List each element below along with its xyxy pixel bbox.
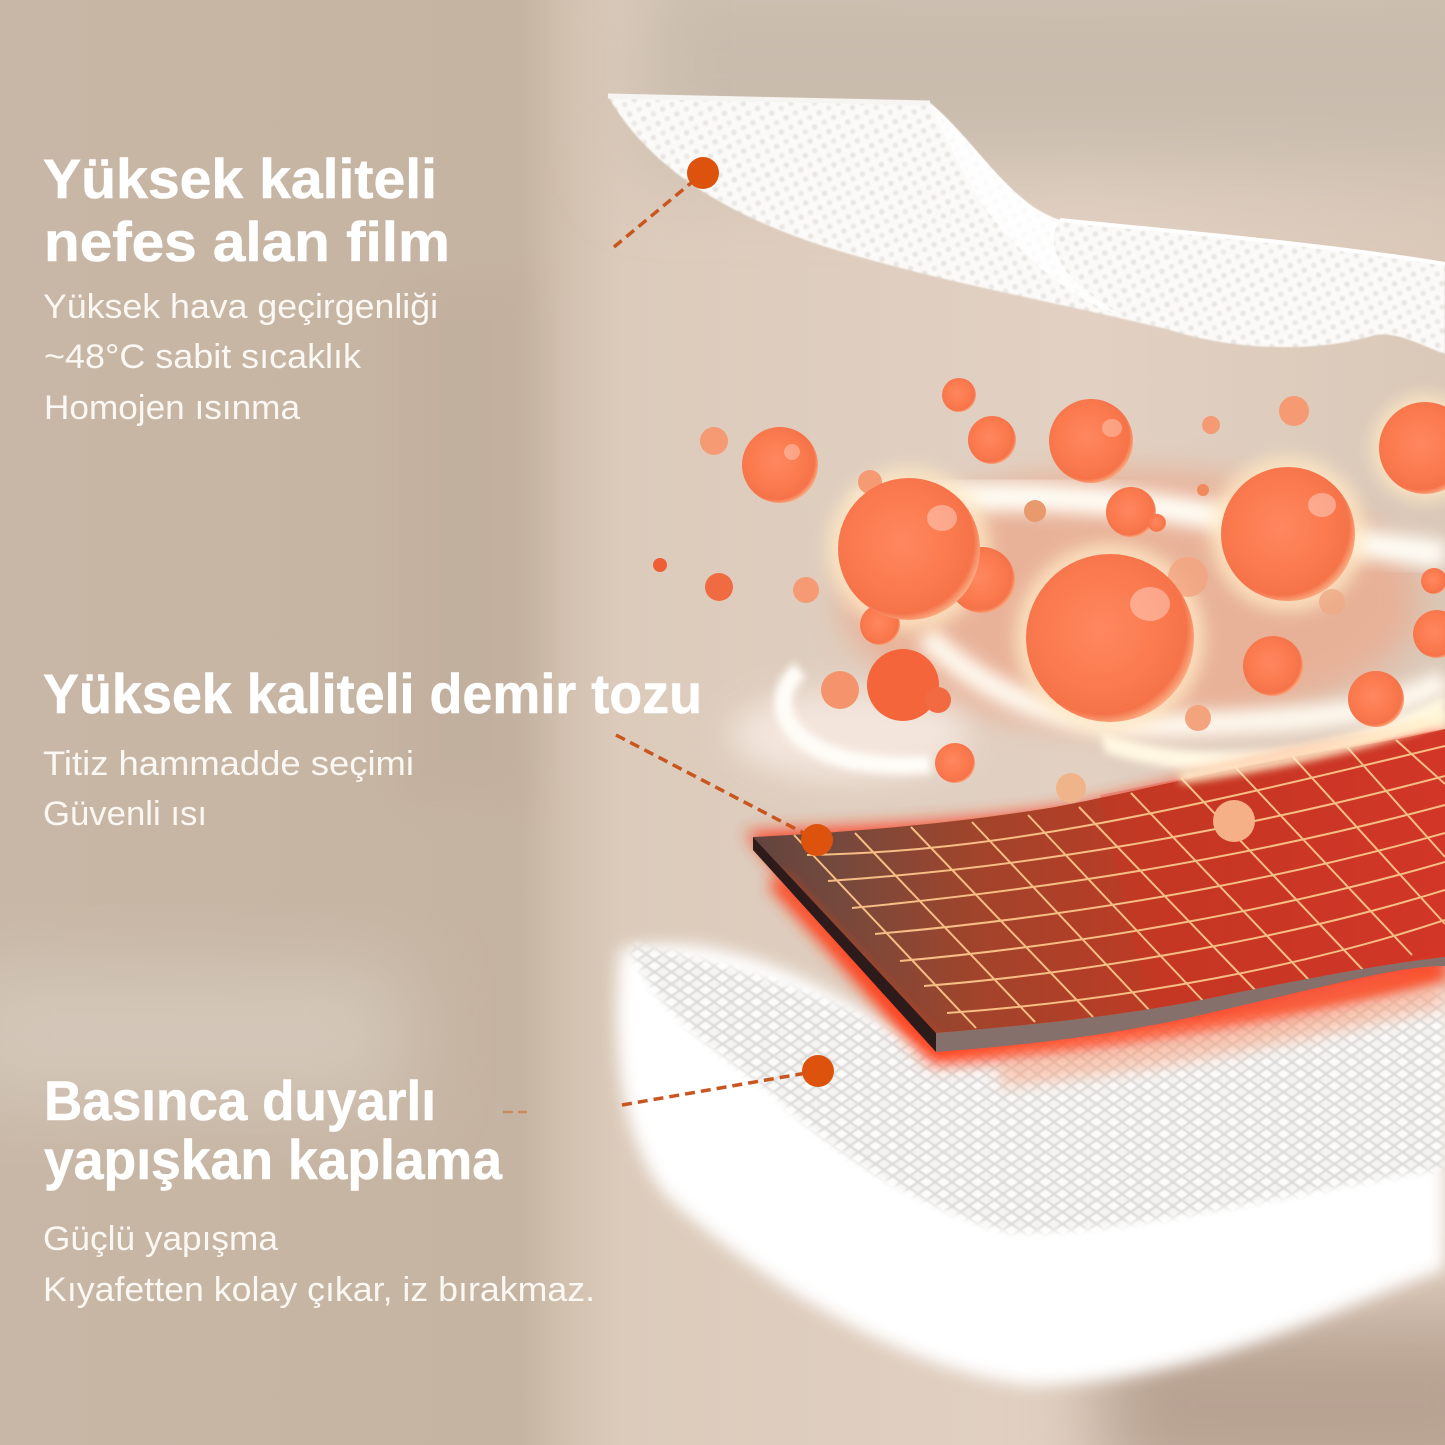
text block: film [43, 147, 450, 427]
plate glow [745, 730, 1445, 1066]
heading: adhesive: yapışkan kaplama [44, 1128, 503, 1191]
description: iron powder: Titiz hammadde seçimi [43, 745, 414, 783]
plate texture [1100, 729, 1445, 1012]
description: adhesive: Kıyafetten kolay çıkar, iz bırakmaz. [43, 1271, 595, 1309]
text block: adhesive [43, 1069, 595, 1309]
heating plate with iron powder grid [745, 715, 1445, 1066]
red glow under plate [775, 880, 1445, 1056]
bottom layer: pressure sensitive adhesive [600, 837, 1445, 1385]
text block: iron powder [43, 662, 702, 833]
plate side edge [753, 837, 936, 1052]
description: film [43, 288, 438, 427]
glowing grid lines [794, 740, 1445, 1028]
swirl overlapping plate edge [1180, 715, 1445, 778]
heading: film: Yüksek kaliteli [43, 147, 437, 210]
heading: film: nefes alan film [44, 210, 450, 273]
description: iron powder: Güvenli ısı [43, 795, 207, 833]
heading: adhesive: Basınca duyarlı [44, 1069, 436, 1132]
callout: adhesive [503, 1055, 834, 1112]
description: adhesive: Güçlü yapışma [43, 1220, 278, 1258]
description: film: ~48°C sabit sıcaklık [44, 338, 362, 376]
callout: iron powder [616, 735, 833, 856]
heading: film [43, 147, 450, 273]
iron powder particles [653, 378, 1445, 842]
callout: film [614, 157, 719, 247]
description: adhesive [43, 1220, 595, 1309]
description: film: Yüksek hava geçirgenliği [43, 288, 438, 326]
heading: adhesive [44, 1069, 503, 1191]
plate front edge [936, 957, 1445, 1052]
heat swirls [730, 470, 1445, 780]
ball halos [827, 394, 1445, 733]
heading: iron powder: Yüksek kaliteli demir tozu [43, 662, 702, 725]
description: film: Homojen ısınma [44, 389, 300, 427]
description: iron powder [43, 745, 414, 833]
top layer: breathable film [608, 96, 1445, 354]
